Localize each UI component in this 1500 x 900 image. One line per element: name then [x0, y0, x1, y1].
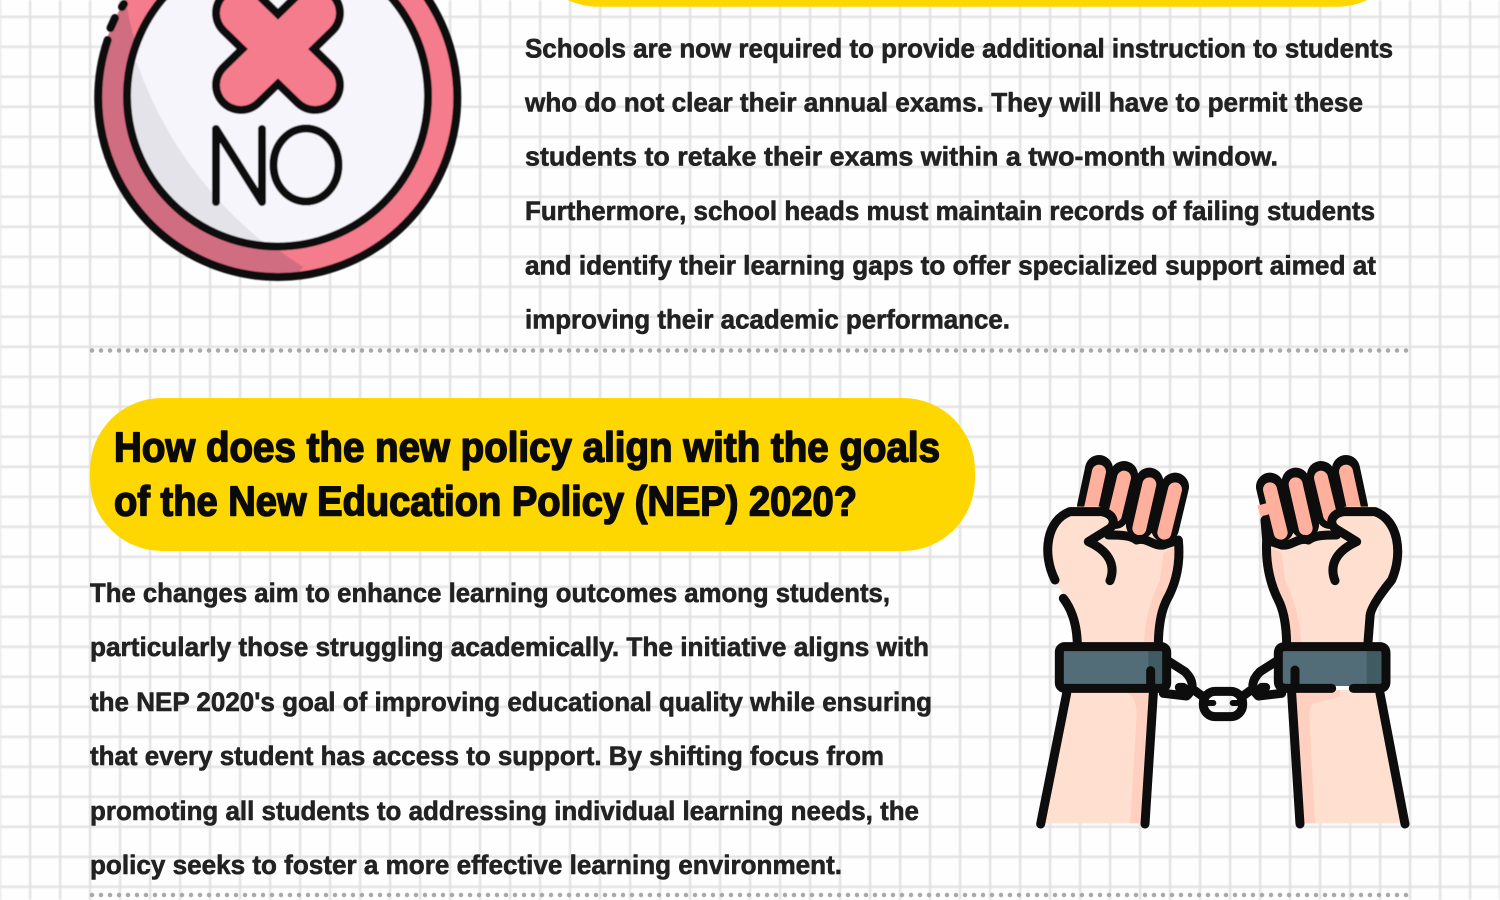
- text block: additional instruction: Schools are now required to provide additional instruction to students: [525, 34, 1393, 64]
- text block: NEP alignment answer: the NEP 2020's goal of improving educational quality while ensuring: [90, 687, 932, 717]
- right fist: [1262, 469, 1399, 647]
- heading pill: NEP alignment: [90, 398, 975, 551]
- text block: additional instruction: and identify their learning gaps to offer specialized support aimed at: [525, 250, 1376, 280]
- text block: additional instruction: improving their academic performance.: [525, 304, 1010, 334]
- text block: NEP alignment answer: that every student has access to support. By shifting focus from: [90, 741, 884, 771]
- chain: [1163, 660, 1282, 717]
- left fist: [1048, 469, 1179, 647]
- heading pill: NEP alignment: of the New Education Policy (NEP) 2020?: [114, 478, 857, 524]
- text block: NEP alignment answer: The changes aim to enhance learning outcomes among students,: [90, 578, 890, 608]
- text block: NEP alignment answer: promoting all students to addressing individual learning needs, the: [90, 796, 919, 826]
- text block: additional instruction: students to retake their exams within a two-month window.: [525, 142, 1278, 172]
- text block: NEP alignment answer: particularly those struggling academically. The initiative aligns with: [90, 632, 929, 662]
- right forearm: [1292, 690, 1405, 824]
- icon: handcuffed fists: [1041, 469, 1405, 824]
- left cuff: [1059, 647, 1167, 688]
- left forearm: [1041, 690, 1153, 824]
- right cuff: [1278, 647, 1386, 688]
- icon: NO sign with cross: [93, 0, 462, 282]
- text block: NEP alignment answer: [90, 578, 932, 880]
- top yellow heading pill (cropped): [526, 0, 1409, 7]
- text block: NEP alignment answer: policy seeks to foster a more effective learning environment.: [90, 850, 842, 880]
- text block: additional instruction: Furthermore, school heads must maintain records of failing students: [525, 196, 1375, 226]
- heading pill: NEP alignment: How does the new policy align with the goals: [114, 424, 940, 470]
- text block: additional instruction: [524, 34, 1393, 334]
- text block: additional instruction: who do not clear their annual exams. They will have to permit these: [524, 88, 1363, 118]
